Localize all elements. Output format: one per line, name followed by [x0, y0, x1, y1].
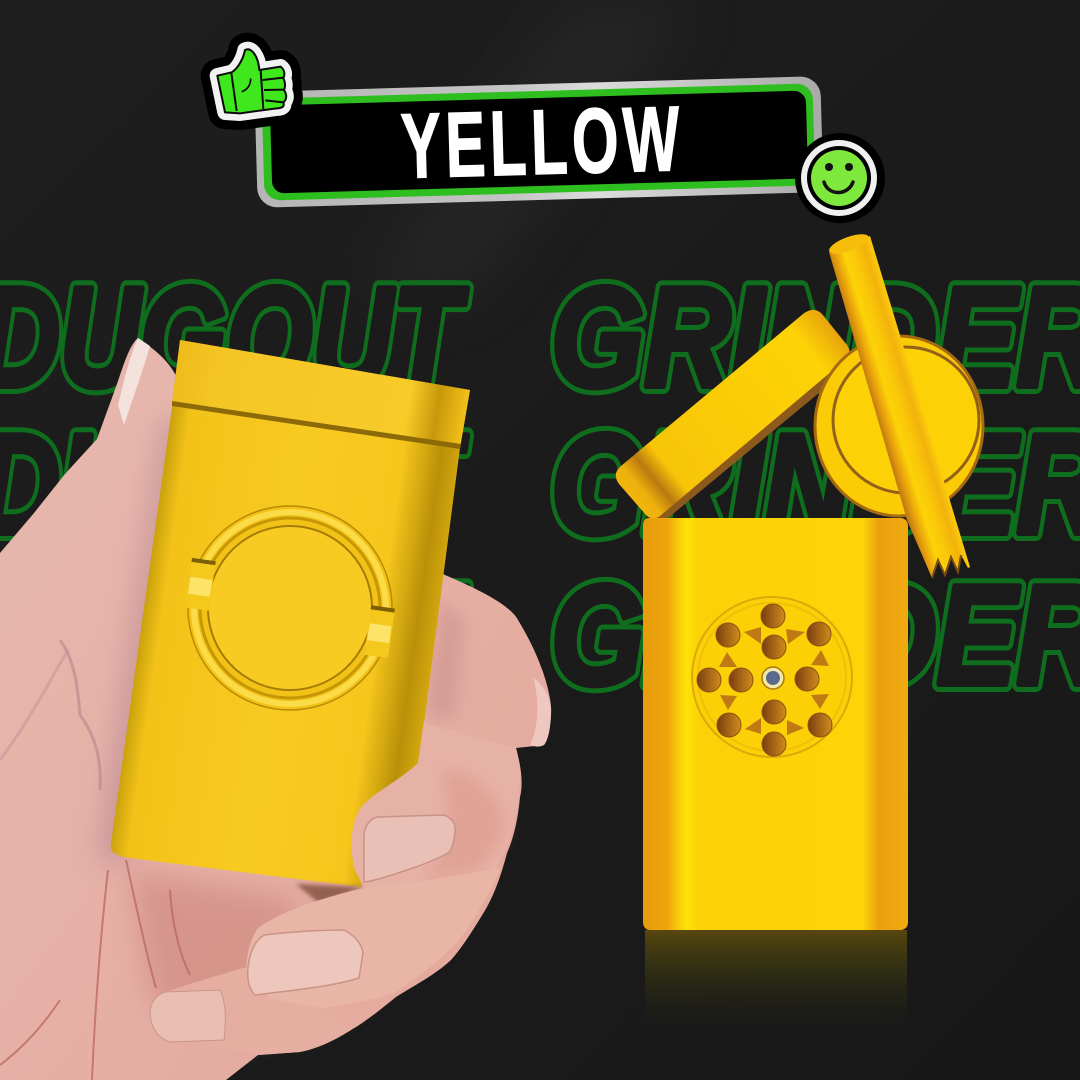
circular emboss on box — [173, 493, 407, 723]
banner label: YELLOW — [400, 88, 685, 198]
nail: ring finger — [248, 930, 363, 995]
thumb web fold — [60, 640, 100, 790]
grinder holes — [697, 604, 832, 756]
grinder plate — [692, 597, 852, 757]
palm creases — [0, 860, 190, 1080]
title banner — [254, 76, 824, 208]
ring finger — [246, 868, 500, 1008]
shading along the box edge — [100, 420, 185, 860]
left notch — [185, 558, 216, 611]
right product: disc — [815, 336, 983, 516]
grinder teeth — [719, 627, 829, 735]
icon: thumbs up — [217, 49, 286, 113]
right product: open grinder body — [643, 518, 908, 930]
nail: middle finger — [364, 815, 455, 882]
magnet — [762, 667, 784, 689]
outlined background text: dark letter interior — [0, 258, 1080, 715]
right product: tube — [827, 230, 970, 578]
right product: hinged lid — [616, 310, 850, 519]
hand holding product: palm, thumb and index finger — [0, 338, 551, 1080]
outlined background text: green outer contour — [0, 258, 1080, 715]
middle finger — [351, 720, 520, 888]
nail: little finger — [150, 990, 225, 1042]
right notch — [364, 605, 395, 658]
nail: index finger — [530, 677, 551, 747]
gap shadow under box — [296, 884, 364, 904]
left product: closed yellow box — [111, 340, 470, 887]
right product reflection — [645, 930, 907, 1025]
hand: fingers over the box — [150, 720, 520, 1055]
little finger — [150, 967, 351, 1055]
thumb nail highlight — [118, 338, 150, 425]
icon: smiley face — [795, 133, 885, 223]
